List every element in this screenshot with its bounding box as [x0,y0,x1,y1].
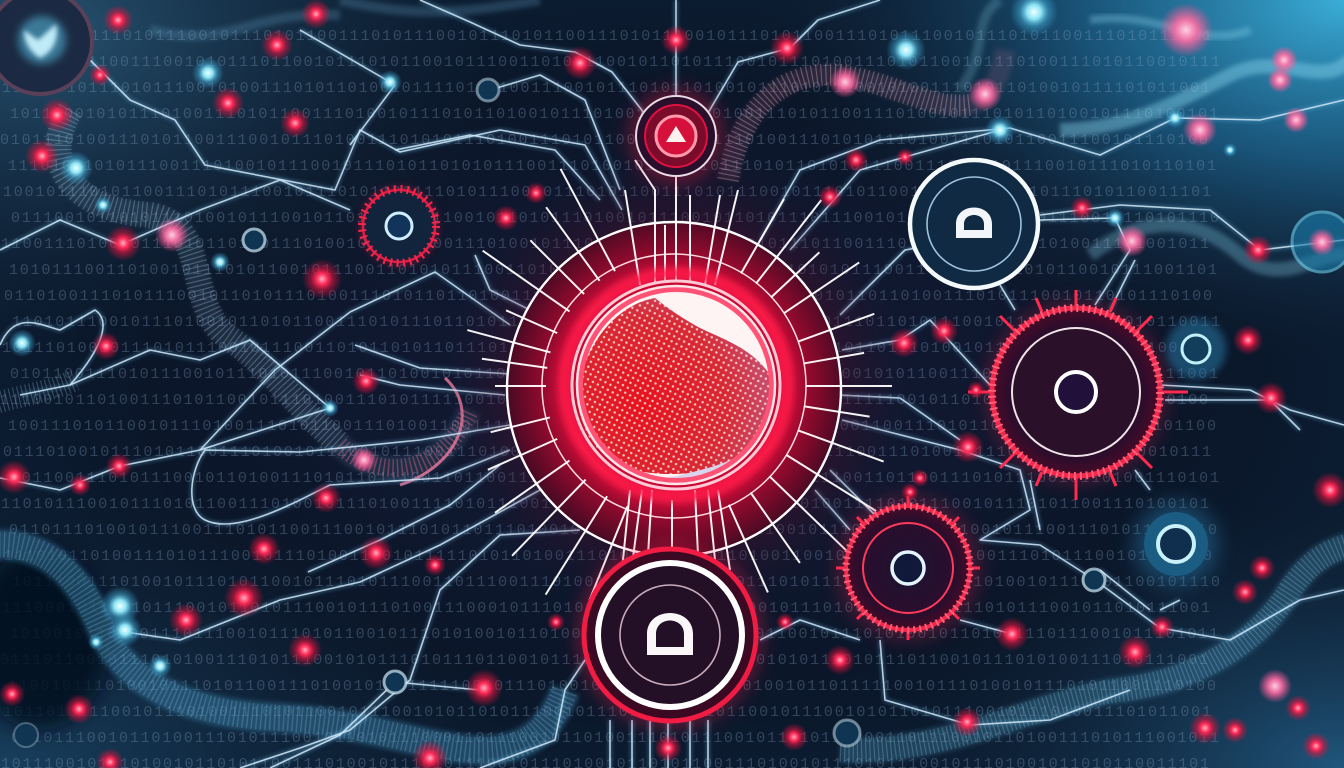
binary code background: 1011101001011101011100101110011010110101101110100101110101110010111001101011010110111010010111010111001011100110 [2,340,1212,357]
binary code background: 1100101110100101110101100111010010110111110010111010010111010110011101001011011111001011101001011101011001110100 [8,678,1218,695]
icon: blue glowing ring, right [1134,212,1344,586]
binary code background: 1110100101011100111010010111001011101011010101110011101001011100101110101101010111001110100101110010111010110101 [8,158,1218,175]
binary code background: 0111010110011100101011101100101110101100101110011010111001011010111001011101001110101100101110100111010110010111 [12,54,1222,71]
binary code background: 1101011100101110101100111010010111010011110101110010111010110011101001011101001111010111001011101011001110100101 [1,496,1211,513]
binary code background: 1011001110101110010110100111010110111001101100111010111001011010011101011011100110110011101011100101101001110101 [11,470,1221,487]
icon: upper-right shield badge [910,160,1038,288]
binary code background: 1001110101100101110100111010110011101001100111010110010111010011101011001110100110011101011001011101001110101100 [8,418,1218,435]
radial spokes [467,150,892,600]
dark shadow patch, lower left [0,550,110,730]
binary code background: 1101011100101110100101101011001110101110110101110010111010010110101100111010111011010111001011101001011010110011 [12,314,1222,331]
central core: rings and sphere [467,150,892,600]
ribbon: upper-left mesh wave [0,110,470,485]
blue ring nodes [14,79,1105,747]
binary code background: 1110001011101011100101101011100101110100111000101110101110010110101110010111010011100010111010111001011010111001 [2,600,1212,617]
sphere [577,286,775,484]
central ring glow [446,156,906,616]
binary code background: 0110111001011010011101011100101101011100011011100101101001110101110010110101110001101110010110100111010111001011 [11,730,1221,747]
binary code background: 0111010010111010110011101001011100101110011101001011101011001110100101110010111001110100101110101100111010010111 [3,444,1213,461]
binary code background: 0101100111010111001011101011100101101001010110011101011100101110101110010110100101011001110101110010111010111001 [10,366,1220,383]
binary code background: 1001011101011001110101110010111010110011101011100101110101100111010111001011101011001110101110010111010110011101 [3,184,1213,201]
binary code background: 0110100111010111001011010111010011101011011010011101011100101101011101001110101101101001110101110010110101110100 [4,288,1214,305]
icon: right red spiky node [968,290,1188,500]
binary code background: 1100111010010111010110100111010010111011001110100101110101101001110100101110110011101001011101011010011101001011 [1,236,1211,253]
binary code background: 0111001011010111010010111001011010111011100101101011101001011100101101011101110010110101110100101110010110101110 [11,210,1221,227]
ribbon: upper pink wave [728,50,1005,180]
ribbon: lower-left blue wave [0,545,565,750]
binary code background: 0101110100111010110011100101110100111010101110100111010110011100101110100111010101110100111010110011100101110100 [0,132,1210,149]
binary code background: 1010010110100111011100101110101100101110101001011010011101110010111010110010111010100101101001110111001011101011 [10,626,1220,643]
icon: left small spiky node [359,186,439,266]
binary code background: 1010111001101001011101011001011100110101011100110100101110101100101110011010101110011010010111010110010111001101 [9,262,1219,279]
icon: lower-right red spiky node [836,496,980,640]
binary code background: 1010110011101011100101110101100111010111001011101011001110101110010111010110011101011100101110101100111010111001 [4,28,1214,45]
binary code background: 1011100111010010111010110010111010111001101110011101001011101011001011101011100110111001110100101110101100101110 [12,574,1222,591]
icon: top-left badge with heart [0,0,92,94]
binary code background: 1110010110100111010110010111010011101011111001011010011101011001011101001110101111100101101001110101100101110100 [0,392,1210,409]
binary code background: 1011010111001011101001110101100101110010101101011100101110100111010110010111001010110101110010111010011101011001 [3,704,1213,721]
binary code background: 0110111010010111001110101100111001011101011011101001011100111010110011100101110101101110100101110011101011001110 [9,522,1219,539]
binary code background: 0111011001011101010011101011100101011101011101100101110101001110101110010101110101110110010111010100111010111001 [0,652,1210,669]
icon: bottom lock badge [580,545,760,725]
binary code background: 1101001011101011100101001110101101001011110101100111001011101011010010111010111001010011101011010010111101011001 [2,80,1212,97]
icon: small red top node with triangle [630,90,722,182]
binary code background: 1110101101001110101110010111010011001011111010110100111010111001011101001100101111101011010011101011100101110100 [4,548,1214,565]
binary code background: 1011100101011101001110101100111010010111010110100101110100101011101001110101100111010010111010110100101110100101 [10,106,1220,123]
